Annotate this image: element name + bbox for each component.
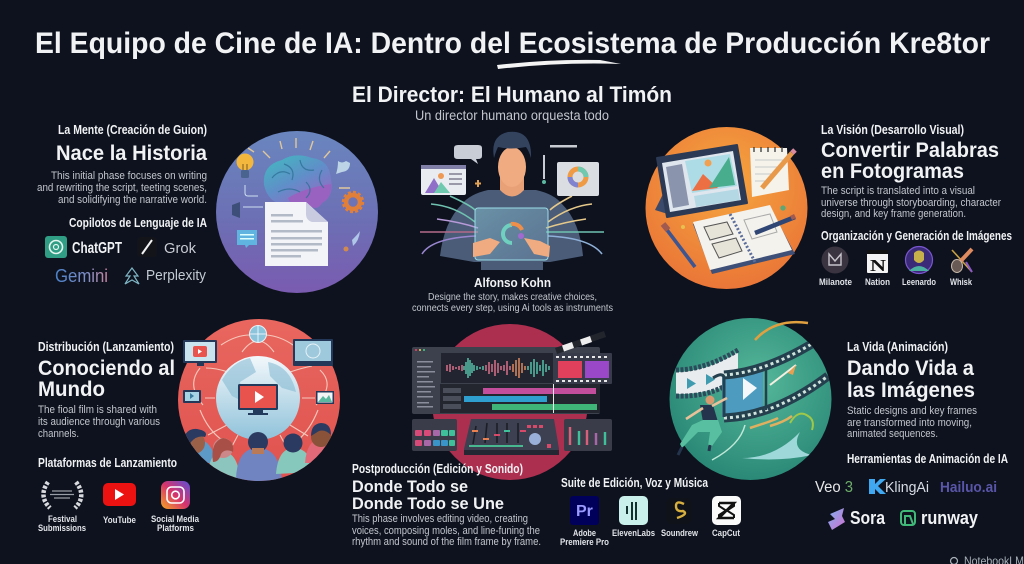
panel: distribucion text: The fioal film is shared with — [38, 404, 157, 416]
panel: postproduccion text: Donde Todo se — [352, 477, 468, 496]
panel: la mente text: La Mente (Creación de Guion) — [58, 122, 207, 137]
waveform — [444, 364, 462, 372]
notebook — [693, 207, 795, 274]
panel: la vida text — [847, 339, 1008, 466]
donut card — [557, 162, 599, 196]
tablet left — [183, 390, 201, 403]
panel: distribucion text: Plataformas de Lanzamiento — [38, 455, 177, 470]
panel: la vision text: design, and key frame generation. — [821, 208, 966, 220]
panel: la vida text: are transformed into moving, — [847, 417, 972, 429]
logos: release platforms: Social Media — [151, 514, 200, 525]
audience — [186, 423, 331, 481]
illustration: brain and script — [216, 131, 378, 293]
logos: animation tools: KlingAi — [885, 480, 929, 496]
illustration: visual development — [646, 127, 808, 289]
title: El Equipo de Cine de IA: Dentro del Ecosistema de Producción Kre8tor — [35, 27, 990, 60]
monitor right — [293, 339, 333, 366]
speech bubble — [454, 145, 482, 164]
gear — [346, 195, 360, 209]
panel: distribucion text: Conociendo al — [38, 357, 175, 380]
panel: la vision text — [821, 122, 1012, 243]
panel: distribucion text: Distribución (Lanzamiento) — [38, 339, 174, 354]
logos: editing suite: Adobe — [573, 528, 596, 539]
presenter caption: connects every step, using Ai tools as instruments — [412, 303, 613, 314]
logos: editing suite: Pr — [576, 503, 593, 520]
logos: editing suite — [560, 496, 741, 548]
chat bubble — [237, 230, 257, 248]
logos: image tools: Milanote — [819, 277, 852, 288]
notepad — [750, 148, 789, 197]
panel: la vida text: Static designs and key frames — [847, 405, 977, 417]
logos: release platforms: Festival — [48, 514, 77, 525]
heading: director: Un director humano orquesta todo — [415, 107, 609, 123]
illustration: distribution globe — [178, 319, 340, 482]
panel: la vision text: universe through storyboarding, character — [821, 197, 1001, 209]
panel: la vida text: animated sequences. — [847, 428, 938, 440]
logos: editing suite: ElevenLabs — [612, 528, 655, 539]
logos: animation tools: Sora — [850, 508, 886, 528]
panel: distribucion text — [38, 339, 177, 470]
runner — [700, 405, 718, 422]
logos: editing suite: Soundrew — [661, 528, 698, 539]
timeline tracks — [483, 388, 596, 394]
illustration: human director — [420, 132, 604, 270]
panel: la mente text: and solidifying the narrative world. — [58, 194, 207, 206]
sidebar — [417, 361, 435, 408]
logos: language copilots: Perplexity — [146, 268, 207, 284]
panel: distribucion text: channels. — [38, 428, 79, 440]
panel: la vision text: en Fotogramas — [821, 160, 964, 183]
front strip bands — [724, 342, 814, 380]
logos: editing suite: Premiere Pro — [560, 537, 609, 548]
panel: postproduccion text: This phase involves editing video, creating — [352, 513, 528, 525]
logos: image tools — [819, 246, 973, 288]
panel: la mente text: This initial phase focuses on writing — [51, 170, 207, 182]
glass panel — [475, 208, 548, 260]
logos: image tools: Nation — [865, 277, 890, 288]
top globe icon — [250, 326, 266, 342]
panel: distribucion text: its audience through various — [38, 416, 160, 428]
script page — [265, 202, 328, 266]
logos: release platforms — [38, 481, 200, 534]
panel: la mente text: Nace la Historia — [56, 142, 207, 165]
presenter caption — [412, 276, 613, 314]
panel: postproduccion text — [352, 461, 709, 548]
center monitor — [238, 384, 278, 410]
panel: la mente text: Copilotos de Lenguaje de IA — [69, 215, 207, 230]
tablet — [655, 190, 671, 215]
pad mixer — [412, 419, 457, 451]
logos: language copilots: ChatGPT — [72, 240, 122, 257]
right mixer — [564, 419, 612, 451]
heading: director — [352, 82, 672, 123]
logos: animation tools: Hailuo.ai — [940, 480, 997, 496]
panel: distribucion text: Mundo — [38, 378, 105, 401]
logos: image tools: Whisk — [950, 277, 973, 288]
brush — [664, 226, 695, 267]
clapper — [555, 331, 606, 354]
presenter caption: Designe the story, makes creative choices, — [428, 292, 597, 303]
logos: image tools: N — [870, 256, 887, 275]
illustration: postproduction studio — [412, 324, 612, 480]
panel: postproduccion text: Donde Todo se Une — [352, 494, 504, 513]
logos: language copilots: Gemini — [55, 266, 108, 286]
front frame — [722, 362, 763, 417]
panel: la vision text: La Visión (Desarrollo Visual) — [821, 122, 964, 137]
logos: animation tools — [815, 479, 997, 530]
panel: postproduccion text: Suite de Edición, Voz y Música — [561, 475, 709, 490]
panel: postproduccion text: Postproducción (Edición y Sonido) — [352, 461, 523, 476]
logos: editing suite: CapCut — [712, 528, 741, 539]
globe — [216, 356, 300, 440]
monitor left — [183, 340, 217, 363]
presenter caption: Alfonso Kohn — [474, 276, 551, 290]
logos: release platforms: Submissions — [38, 523, 86, 534]
logos: image tools: Leenardo — [902, 277, 936, 288]
panel: la mente text — [37, 122, 207, 230]
brain — [264, 155, 332, 216]
heading: director: El Director: El Humano al Timón — [352, 82, 672, 107]
connection lines — [420, 196, 604, 254]
panel: la vida text: La Vida (Animación) — [847, 339, 948, 354]
panel: la vision text: The script is translated into a visual — [821, 185, 975, 197]
window card — [421, 165, 466, 195]
logos: animation tools: Veo 3 — [815, 479, 853, 496]
panel: la vida text: Dando Vida a — [847, 357, 974, 380]
panel: la mente text: and rewriting the script, teeting scenes, — [37, 182, 207, 194]
panel: postproduccion text: rhythm and sound of the film frame by frame. — [352, 536, 541, 548]
main window — [412, 347, 600, 414]
logos: release platforms: YouTube — [103, 515, 136, 526]
illustration: animation film strip — [670, 318, 832, 480]
clip panel — [553, 353, 612, 384]
bulb — [236, 154, 254, 170]
logos: language copilots: Grok — [164, 240, 196, 257]
logos: animation tools: runway — [921, 508, 978, 528]
logos: release platforms: Platforms — [157, 523, 194, 534]
hands — [473, 238, 500, 257]
image card right — [316, 391, 334, 404]
back strip — [676, 352, 738, 394]
logos: language copilots — [45, 236, 207, 286]
panel: la vida text: las Imágenes — [847, 379, 975, 402]
center console — [464, 419, 559, 455]
panel: la vision text: Convertir Palabras — [821, 139, 999, 162]
panel: postproduccion text: voices, composing moles, and line-funing the — [352, 525, 540, 537]
